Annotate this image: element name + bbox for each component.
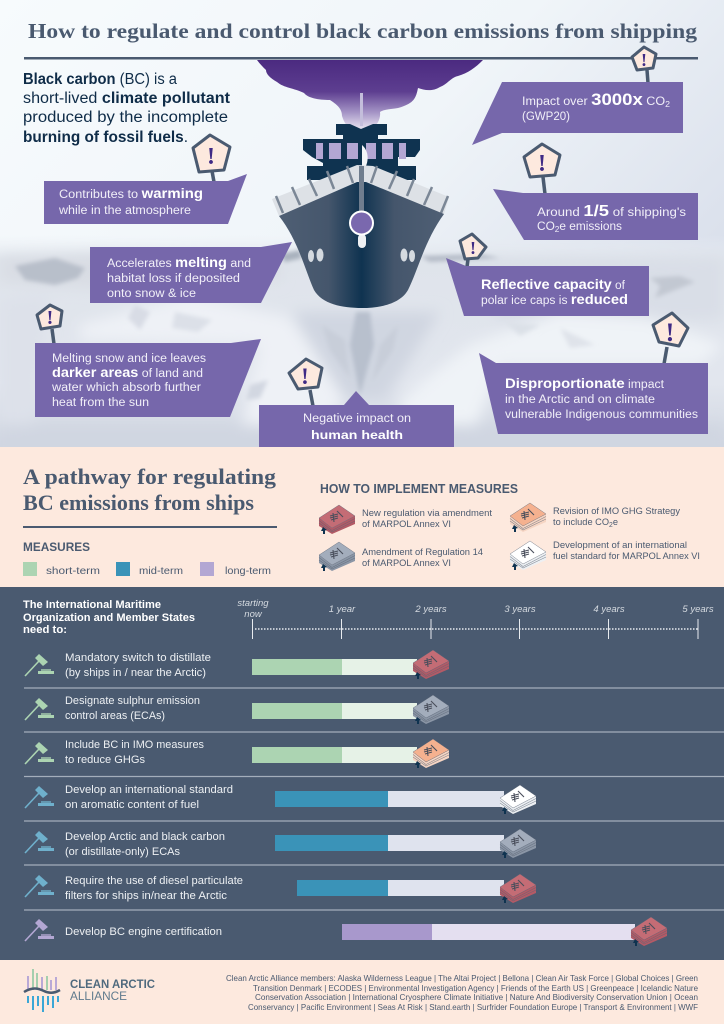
callout: melting [90, 242, 292, 303]
smoke cloud [257, 60, 483, 129]
callout: darker areas: heat from the sun [52, 397, 149, 409]
callout: 1/5 of emissions: CO [537, 221, 554, 233]
warning sign: ! [47, 307, 53, 329]
icon: grey book [319, 542, 355, 571]
warning sign: ! [666, 318, 674, 347]
timeline intro [23, 599, 195, 636]
warning sign: ! [301, 364, 309, 389]
icon: orange book [510, 503, 546, 532]
warning sign [632, 47, 656, 83]
time axis: starting [237, 598, 269, 609]
callout: 1/5 of emissions [493, 144, 698, 240]
revision text: e [613, 517, 618, 528]
ship [272, 124, 449, 308]
callout: warming: Contributes to warming [59, 186, 203, 201]
callout: 3000x CO2: (GWP20) [522, 111, 570, 123]
ship deck rail [272, 165, 449, 216]
callout: reflective capacity: Reflective capacity of [481, 276, 626, 292]
member list: Clean Arctic Alliance members: Alaska Wilderness League | The Altai Project | Bellona | Clean Air Task Force | Global Choices | Green [226, 973, 698, 983]
row: aromatic standard [25, 784, 536, 814]
new regulation text: New regulation via amendment [362, 508, 492, 519]
fuel standard text: Development of an international [553, 540, 687, 551]
member list: Conservancy | Pacific Environment | Seas At Risk | Stand.earth | Surfrider Foundation Europe | Transport & Environment | WWF [248, 1002, 698, 1012]
warning sign: ! [538, 151, 546, 177]
fuel standard text: fuel standard for MARPOL Annex VI [553, 551, 700, 562]
ship anchor mast [350, 166, 373, 248]
warning sign [460, 234, 486, 267]
measures legend: mid-term [139, 565, 183, 577]
row: Arctic ECAs: (or distillate-only) ECAs [65, 846, 180, 858]
ship superstructure [303, 124, 420, 180]
callout: darker areas: darker areas of land and [52, 365, 203, 380]
row: include BC [25, 739, 449, 768]
revision text: to include CO [553, 517, 611, 528]
row: sulphur ECAs [25, 695, 449, 724]
callout: human health: human health [311, 430, 403, 442]
warning sign [524, 144, 560, 194]
time axis: 5 years [682, 604, 714, 615]
row: include BC: to reduce GHGs [65, 754, 145, 766]
measures legend: MEASURES [23, 540, 90, 554]
revision text [553, 506, 680, 529]
warning sign [193, 135, 230, 182]
ship hull [279, 182, 444, 308]
time axis: 3 years [504, 604, 536, 615]
callout: 1/5 of emissions: 2 [555, 225, 560, 234]
warning sign: ! [207, 144, 215, 170]
row: Arctic ECAs: Develop Arctic and black carbon [65, 831, 225, 843]
row: aromatic standard: Develop an international standard [65, 784, 233, 796]
revision text: 2 [609, 522, 613, 529]
intro text: Black carbon (BC) is a [23, 71, 177, 88]
time axis: 2 years [414, 604, 447, 615]
warning sign: ! [470, 238, 476, 258]
row: mandatory switch: (by ships in / near the Arctic) [65, 667, 206, 679]
row: particulate filters: filters for ships in/near the Arctic [65, 890, 228, 902]
callout: 3000x CO2 [472, 47, 683, 145]
amendment text: of MARPOL Annex VI [362, 558, 451, 569]
intro text: produced by the incomplete [23, 109, 228, 126]
callout: melting: habitat loss if deposited [107, 273, 240, 285]
callout: melting: onto snow & ice [107, 288, 196, 300]
callout: 3000x CO2: 2 [665, 100, 671, 109]
warning sign [37, 305, 62, 344]
warning sign [289, 359, 322, 406]
time axis [237, 598, 714, 639]
callout: darker areas: water which absorb further [51, 382, 201, 394]
panel: footer [0, 960, 724, 1024]
row: aromatic standard: on aromatic content of fuel [65, 799, 199, 811]
fuel standard text [553, 540, 700, 562]
callout: 3000x CO2: Impact over 3000x CO [522, 90, 663, 109]
warning sign [653, 313, 688, 364]
new regulation text: of MARPOL Annex VI [362, 519, 451, 530]
icon: red book [319, 505, 355, 534]
callout: melting: Accelerates melting and [107, 255, 251, 270]
row: sulphur ECAs: control areas (ECAs) [65, 710, 165, 722]
row: mandatory switch [25, 650, 449, 679]
measures legend [23, 540, 271, 577]
callout: reflective capacity [446, 234, 649, 316]
pathway heading [23, 464, 277, 528]
revision text: Revision of IMO GHG Strategy [553, 506, 680, 517]
callout: disproportionate: Disproportionate impact [505, 375, 665, 391]
pathway heading: BC emissions from ships [23, 490, 254, 515]
title: How to regulate and control black carbon emissions from shipping [28, 19, 697, 43]
timeline intro: Organization and Member States [23, 612, 195, 624]
row: sulphur ECAs: Designate sulphur emission [65, 695, 200, 707]
timeline intro: need to: [23, 624, 67, 636]
row: particulate filters: Require the use of diesel particulate [65, 875, 243, 887]
measures legend: long-term [225, 565, 271, 577]
logo: CLEAN ARCTIC [70, 979, 155, 991]
time axis: 4 years [593, 604, 625, 615]
callout: disproportionate [479, 313, 708, 434]
intro text [23, 71, 230, 146]
measures legend: short-term [46, 565, 100, 577]
time axis: 1 year [329, 604, 356, 615]
intro text: short-lived climate pollutant [23, 90, 230, 107]
pathway heading: A pathway for regulating [23, 464, 276, 489]
warning sign: ! [641, 50, 647, 70]
intro text: burning of fossil fuels. [23, 129, 188, 146]
callout: darker areas: Melting snow and ice leaves [52, 353, 206, 365]
callout: reflective capacity: polar ice caps is reduced [481, 291, 628, 307]
ship portholes [308, 248, 415, 262]
arctic background [0, 0, 724, 460]
row: engine certification: Develop BC engine certification [65, 926, 222, 938]
panel: timeline [0, 587, 724, 960]
callout: darker areas [35, 305, 261, 417]
how to implement legend [319, 481, 700, 571]
callout: human health: Negative impact on [303, 413, 411, 425]
row: mandatory switch: Mandatory switch to distillate [65, 652, 211, 664]
callout: 1/5 of emissions: e emissions [559, 221, 622, 233]
row: include BC: Include BC in IMO measures [65, 739, 204, 751]
callout: disproportionate: in the Arctic and on climate [505, 394, 655, 406]
logo [24, 969, 155, 1012]
member list: Conservation Association | International Cryosphere Climate Initiative | Nature And Biodiversity Conservation Union | Ocean [255, 992, 698, 1002]
icon: white book [510, 541, 546, 570]
timeline intro: The International Maritime [23, 599, 161, 611]
logo: ALLIANCE [70, 991, 127, 1003]
amendment text [362, 547, 483, 569]
row: particulate filters [25, 874, 536, 903]
panel: pathway [0, 447, 724, 587]
callout: 1/5 of emissions: Around 1/5 of shipping's [537, 203, 686, 220]
row: Arctic ECAs [25, 829, 536, 858]
how to implement legend: HOW TO IMPLEMENT MEASURES [320, 481, 518, 496]
callout: human health [259, 359, 454, 447]
member list [226, 973, 698, 1012]
callout: disproportionate: vulnerable Indigenous communities [505, 409, 698, 421]
callout: warming: while in the atmosphere [58, 205, 191, 217]
amendment text: Amendment of Regulation 14 [362, 547, 483, 558]
time axis: now [244, 609, 263, 620]
new regulation text [362, 508, 492, 530]
member list: Transition Denmark | ECODES | Environmental Investigation Agency | Friends of the Earth US | Greenpeace | Icelandic Nature [253, 983, 698, 993]
row: engine certification [25, 917, 667, 946]
callout: warming [44, 135, 247, 224]
